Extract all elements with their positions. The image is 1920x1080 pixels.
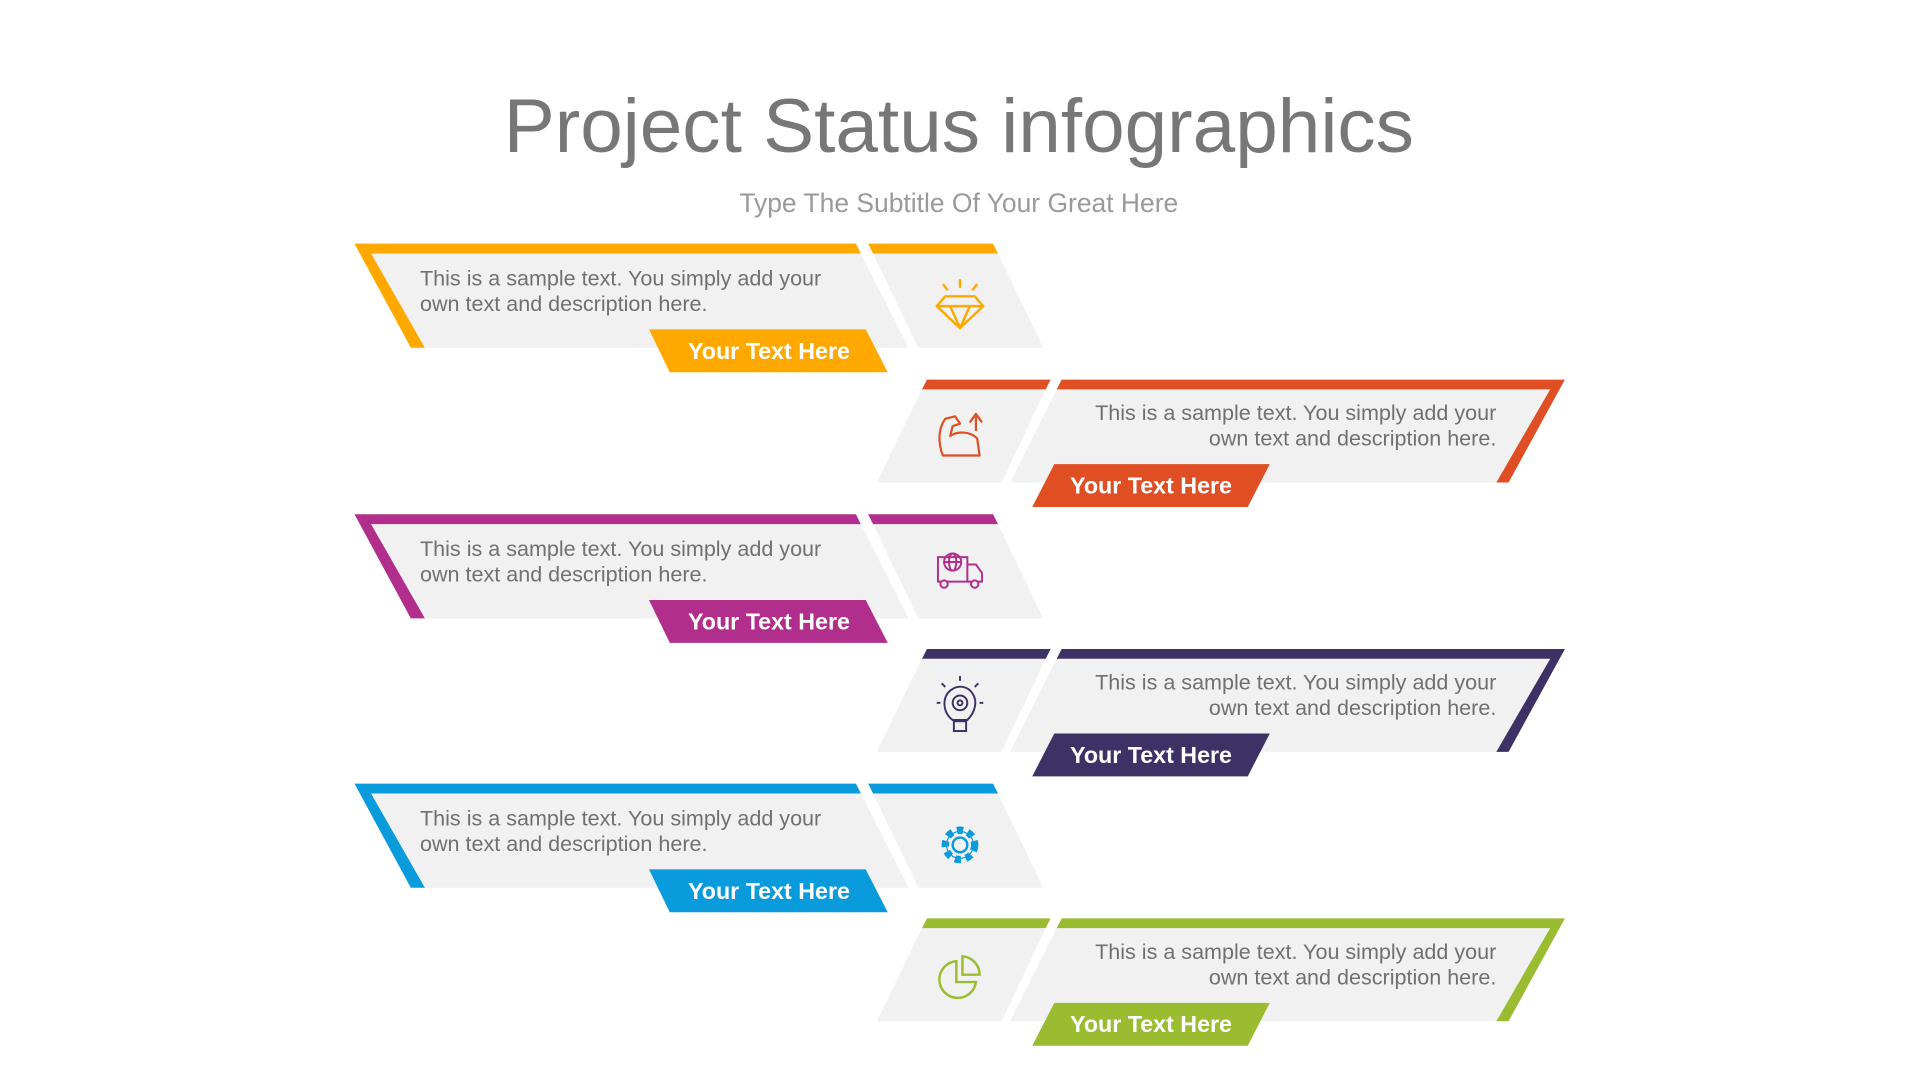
panel: row 4 (navy): Your Text Here xyxy=(1070,742,1232,768)
panel: row 1 (orange): This is a sample text. You simply add your xyxy=(420,265,821,290)
icon: gear xyxy=(945,830,975,860)
panel: row 2 (red): own text and description here. xyxy=(1209,426,1496,451)
panel: row 4 (navy) xyxy=(877,649,1565,776)
panel: row 5 (blue): own text and description here. xyxy=(420,831,707,856)
panel: row 1 (orange): own text and description here. xyxy=(420,291,707,316)
panel: row 1 (orange) xyxy=(354,244,1043,372)
panel: row 3 (magenta): Your Text Here xyxy=(688,608,850,634)
panel: row 6 (green): This is a sample text. You simply add your xyxy=(1095,939,1496,964)
panel: row 5 (blue) xyxy=(354,784,1043,912)
panel: row 4 (navy): own text and description here. xyxy=(1209,695,1496,720)
panel: row 2 (red) xyxy=(877,380,1565,507)
panel: row 6 (green) xyxy=(877,918,1565,1046)
panel: row 6 (green): own text and description here. xyxy=(1209,964,1496,989)
icon: arm xyxy=(939,414,982,456)
panel: row 5 (blue): This is a sample text. You simply add your xyxy=(420,805,821,830)
title: Project Status infographics xyxy=(504,84,1414,169)
panel: row 3 (magenta): This is a sample text. You simply add your xyxy=(420,536,821,561)
icon: delivery truck xyxy=(938,553,982,588)
panel: row 1 (orange): Your Text Here xyxy=(688,338,850,364)
panel: row 2 (red): This is a sample text. You simply add your xyxy=(1095,400,1496,425)
panel: row 6 (green): Your Text Here xyxy=(1070,1011,1232,1037)
panel: row 5 (blue): Your Text Here xyxy=(688,878,850,904)
panel: row 4 (navy): This is a sample text. You simply add your xyxy=(1095,669,1496,694)
icon: diamond xyxy=(937,279,983,328)
panel: row 2 (red): Your Text Here xyxy=(1070,472,1232,498)
icon: pie chart xyxy=(939,956,980,998)
subtitle: Type The Subtitle Of Your Great Here xyxy=(739,188,1178,218)
icon: lightbulb with gear xyxy=(937,676,983,731)
panel: row 3 (magenta) xyxy=(354,514,1043,643)
panel: row 3 (magenta): own text and description here. xyxy=(420,562,707,587)
